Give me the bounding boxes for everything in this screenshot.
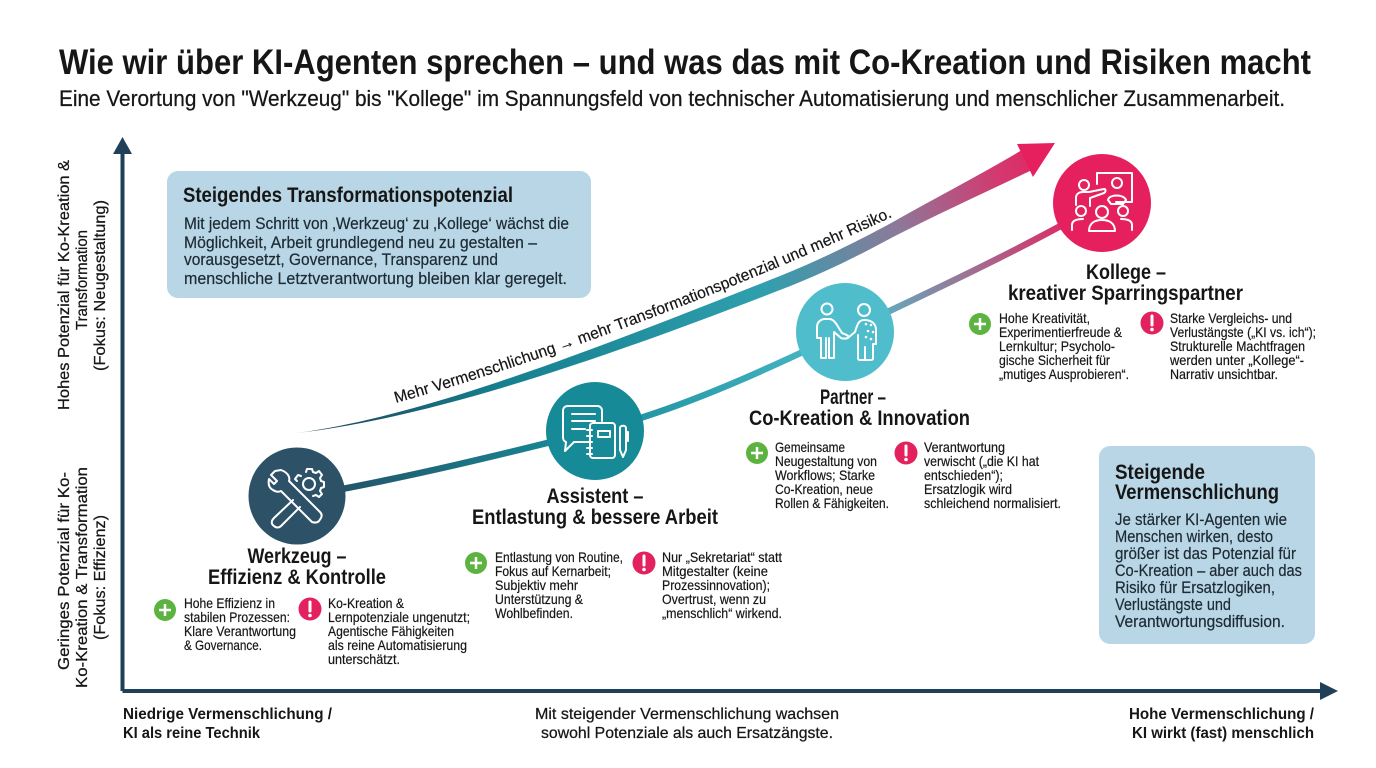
y axis label: low: Ko-Kreation & Transformation	[74, 467, 91, 688]
panel: Steigende Vermenschlichung: Je stärker KI-Agenten wie	[1115, 511, 1287, 529]
icon: wrench and gear	[248, 448, 346, 544]
risk: Narrativ unsichtbar.	[1170, 366, 1278, 382]
y axis label: high: Transformation	[74, 230, 91, 330]
x axis label: low	[123, 706, 333, 742]
risk: Overtrust, wenn zu	[662, 591, 766, 607]
risk: verwischt („die KI hat	[924, 453, 1039, 469]
panel: Steigende Vermenschlichung: Vermenschlichung	[1115, 481, 1279, 504]
pro: Lernkultur; Psycholo-	[999, 338, 1115, 354]
stage: Werkzeug	[154, 448, 470, 667]
pro: Neugestaltung von	[775, 453, 877, 469]
risk: Lernpotenziale ungenutzt;	[328, 609, 470, 625]
panel: Steigende Vermenschlichung: Co-Kreation – aber auch das	[1115, 562, 1302, 580]
risk	[1140, 310, 1316, 382]
panel: Steigende Vermenschlichung: größer ist das Potenzial für	[1115, 545, 1296, 563]
axes	[113, 137, 1338, 700]
panel: Steigende Vermenschlichung: Verlustängste und	[1115, 596, 1231, 614]
risk: Verlustängste („KI vs. ich“);	[1170, 324, 1316, 340]
risk: entschieden“);	[924, 467, 1003, 483]
risk: Starke Vergleichs- und	[1170, 310, 1292, 326]
x axis label: centre	[535, 706, 839, 742]
risk: als reine Automatisierung	[328, 637, 467, 653]
pro: Rollen & Fähigkeiten.	[775, 495, 889, 511]
panel: Steigende Vermenschlichung: Risiko für Ersatzlogiken,	[1115, 579, 1275, 597]
risk: Strukturelle Machtfragen	[1170, 338, 1305, 354]
stage: Kollege	[969, 154, 1316, 382]
y axis label: high: (Fokus: Neugestaltung)	[92, 200, 109, 371]
x axis label: low: Niedrige Vermenschlichung /	[123, 706, 333, 723]
y axis label: low: (Fokus: Effizienz)	[92, 515, 109, 640]
curved arrow label: Mehr Vermenschlichung → mehr Transformationspotenzial und mehr Risiko.	[394, 212, 892, 403]
pro: Wohlbefinden.	[495, 605, 573, 621]
pro: gische Sicherheit für	[999, 352, 1110, 368]
icon: chat and notebook	[546, 382, 644, 480]
y axis label: low	[56, 467, 109, 688]
panel: Steigendes Transformationspotenzial	[167, 171, 591, 298]
panel: Steigende Vermenschlichung: Steigende	[1115, 461, 1205, 484]
pro	[746, 439, 889, 511]
pro: Klare Verantwortung	[184, 623, 296, 639]
risk	[894, 439, 1061, 511]
stage: Assistent	[465, 382, 782, 621]
pro: & Governance.	[184, 637, 262, 653]
risk: „menschlich“ wirkend.	[662, 605, 782, 621]
pro: Entlastung von Routine,	[495, 549, 623, 565]
pro	[969, 310, 1129, 382]
x axis label: centre: Mit steigender Vermenschlichung wachsen	[535, 706, 839, 723]
pro	[465, 549, 623, 621]
risk: Agentische Fähigkeiten	[328, 623, 454, 639]
risk	[298, 595, 470, 667]
pro	[154, 595, 296, 653]
panel: Steigende Vermenschlichung: Menschen wirken, desto	[1115, 528, 1273, 546]
panel: Steigende Vermenschlichung: Verantwortungsdiffusion.	[1115, 613, 1285, 631]
risk: Prozessinnovation);	[662, 577, 770, 593]
pro: Subjektiv mehr	[495, 577, 578, 593]
icon: team at presentation board	[1053, 154, 1151, 252]
connecting path	[297, 203, 1102, 497]
risk: unterschätzt.	[328, 651, 400, 667]
stage: Kollege: kreativer Sparringspartner	[1008, 282, 1243, 305]
stage: Assistent: Entlastung & bessere Arbeit	[472, 506, 718, 529]
risk	[632, 549, 782, 621]
icon: human and AI handshake	[796, 283, 894, 381]
pro: stabilen Prozessen:	[184, 609, 290, 625]
stage: Partner: Partner –	[820, 386, 886, 409]
pro: Hohe Effizienz in	[184, 595, 275, 611]
risk: schleichend normalisiert.	[924, 495, 1061, 511]
risk: Verantwortung	[924, 439, 1005, 455]
stage: Werkzeug: Effizienz & Kontrolle	[208, 566, 386, 589]
y axis label: high	[56, 160, 109, 410]
panel: Steigendes Transformationspotenzial: Steigendes Transformationspotenzial	[183, 184, 513, 207]
stage: Kollege: Kollege –	[1086, 261, 1166, 284]
subtitle: Eine Verortung von "Werkzeug" bis "Kollege" im Spannungsfeld von technischer Automatisierung und menschlicher Zusammenarbeit.	[59, 86, 1285, 111]
risk: werden unter „Kollege“-	[1169, 352, 1304, 368]
panel: Steigende Vermenschlichung	[1099, 446, 1315, 644]
panel: Steigendes Transformationspotenzial: Möglichkeit, Arbeit grundlegend neu zu gestalten –	[184, 234, 538, 252]
pro: „mutiges Ausprobieren“.	[999, 366, 1129, 382]
risk: Ko-Kreation &	[328, 595, 405, 611]
stage: Assistent: Assistent –	[546, 485, 644, 508]
pro: Experimentierfreude &	[999, 324, 1123, 340]
pro: Fokus auf Kernarbeit;	[495, 563, 611, 579]
panel: Steigendes Transformationspotenzial: vorausgesetzt, Governance, Transparenz und	[184, 251, 498, 269]
x axis label: high	[1129, 706, 1315, 742]
x axis label: high: KI wirkt (fast) menschlich	[1132, 725, 1314, 742]
stage: Partner	[746, 283, 1061, 511]
risk: Nur „Sekretariat“ statt	[662, 549, 782, 565]
pro: Gemeinsame	[775, 439, 845, 455]
y axis label: high: Hohes Potenzial für Ko-Kreation &	[56, 160, 73, 410]
risk: Mitgestalter (keine	[662, 563, 768, 579]
stage: Partner: Co-Kreation & Innovation	[749, 407, 970, 430]
panel: Steigendes Transformationspotenzial: menschliche Letztverantwortung bleiben klar geregelt.	[184, 270, 567, 288]
x axis label: low: KI als reine Technik	[123, 725, 260, 742]
x axis label: centre: sowohl Potenziale als auch Ersatzängste.	[541, 725, 833, 742]
y axis label: low: Geringes Potenzial für Ko-	[56, 472, 73, 670]
stage: Werkzeug: Werkzeug –	[248, 545, 347, 568]
pro: Hohe Kreativität,	[999, 310, 1090, 326]
arrow: transformation trend	[297, 143, 1055, 433]
panel: Steigendes Transformationspotenzial: Mit jedem Schritt von ‚Werkzeug‘ zu ‚Kollege‘ wächst die	[184, 215, 569, 233]
pro: Workflows; Starke	[775, 467, 875, 483]
pro: Unterstützung &	[495, 591, 584, 607]
risk: Ersatzlogik wird	[924, 481, 1012, 497]
x axis label: high: Hohe Vermenschlichung /	[1129, 706, 1315, 723]
pro: Co-Kreation, neue	[775, 481, 873, 497]
